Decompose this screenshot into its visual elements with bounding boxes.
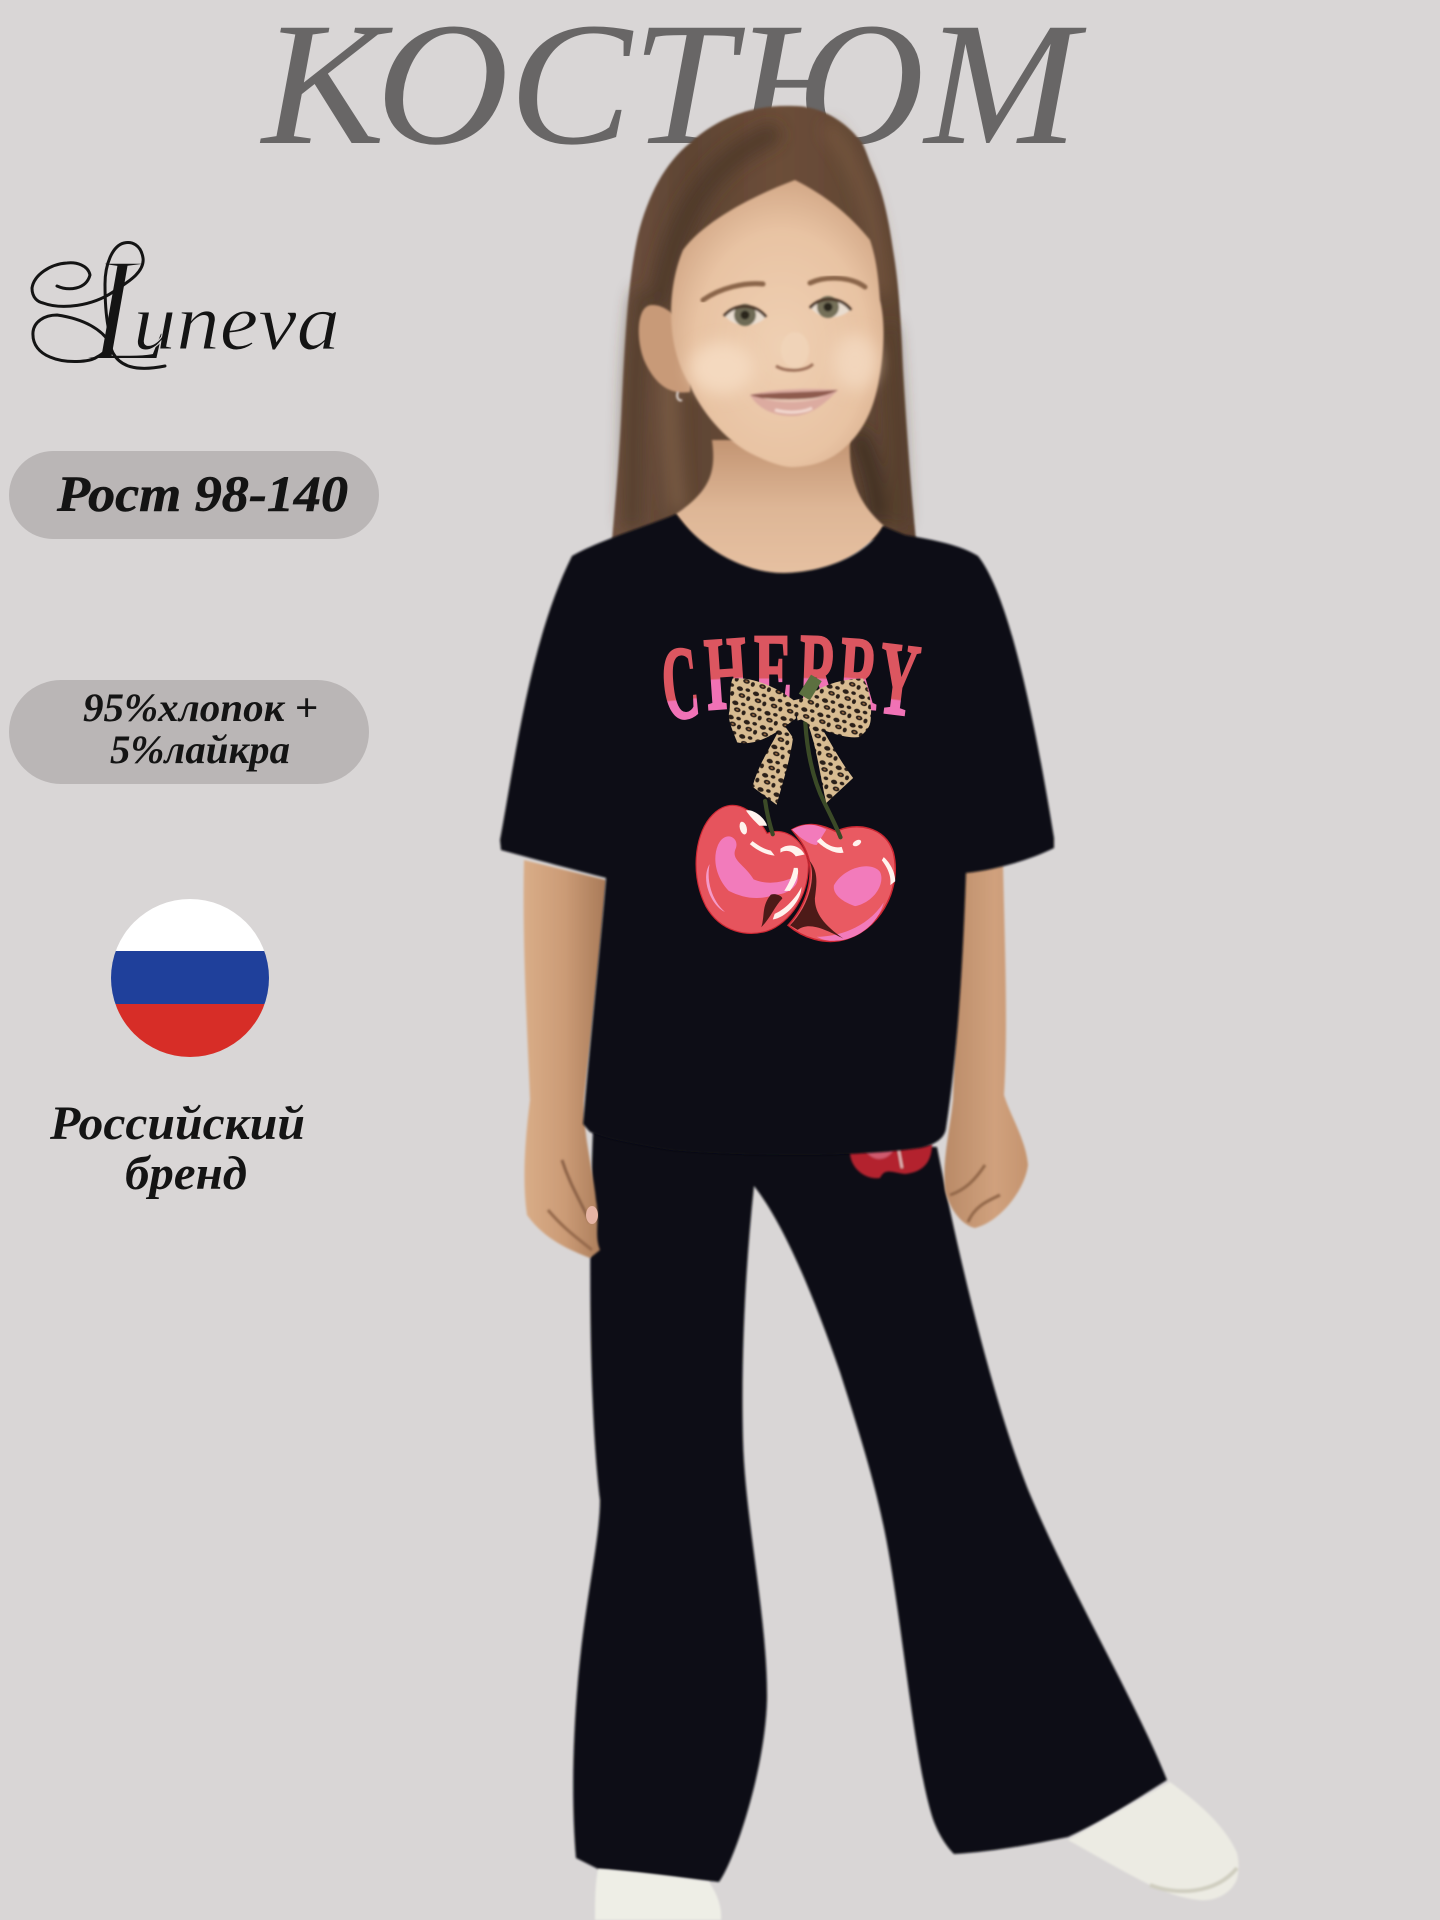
left arm and hand <box>524 860 606 1258</box>
print text: CHERRY: H <box>702 615 752 732</box>
print: cherries on trousers <box>850 1144 932 1178</box>
nose <box>776 332 813 370</box>
t-shirt <box>500 514 1054 1155</box>
eye: right <box>810 296 851 318</box>
hair <box>612 106 916 540</box>
t-shirt print <box>656 612 925 941</box>
neck <box>676 440 884 576</box>
badge: fabric composition <box>9 680 369 784</box>
logo wordmark: uneva <box>133 279 340 367</box>
eyebrows <box>703 278 865 300</box>
caption: Russian brand: бренд <box>125 1147 247 1200</box>
print graphic: bow and cherries <box>696 675 895 941</box>
face <box>671 180 884 467</box>
badge: height range <box>9 451 379 539</box>
bow knot tab <box>799 675 822 700</box>
eye: left <box>724 304 766 326</box>
cherry: right <box>788 825 895 941</box>
shoe: right <box>1068 1782 1239 1900</box>
shoe: left <box>595 1869 721 1920</box>
print text: CHERRY: R <box>797 612 840 729</box>
caption: Russian brand: Российский <box>49 1097 305 1150</box>
mouth <box>750 389 838 416</box>
print text: CHERRY: C <box>656 624 704 742</box>
legs: flared trousers <box>573 1131 1167 1882</box>
print text: CHERRY: Y <box>871 620 925 739</box>
print text: CHERRY: R <box>835 615 882 732</box>
logo flourish <box>32 243 165 368</box>
icon: Russian flag circle <box>111 899 269 1057</box>
figure: girl in costume <box>500 106 1239 1920</box>
badge: fabric composition: 95%хлопок + <box>83 685 318 730</box>
print text: CHERRY <box>656 612 925 742</box>
right arm and hand <box>944 865 1028 1228</box>
ear <box>639 305 696 400</box>
logo: Luneva <box>32 227 340 393</box>
cherry: left <box>696 805 808 933</box>
caption: Russian brand <box>49 1097 305 1200</box>
cherry stems <box>765 722 841 837</box>
badge: height range: Рост 98-140 <box>56 467 348 523</box>
logo wordmark: L <box>86 227 171 393</box>
print text: CHERRY: E <box>754 613 792 728</box>
badge: fabric composition: 5%лайкра <box>110 727 290 772</box>
bow: leopard ribbon <box>729 678 871 805</box>
